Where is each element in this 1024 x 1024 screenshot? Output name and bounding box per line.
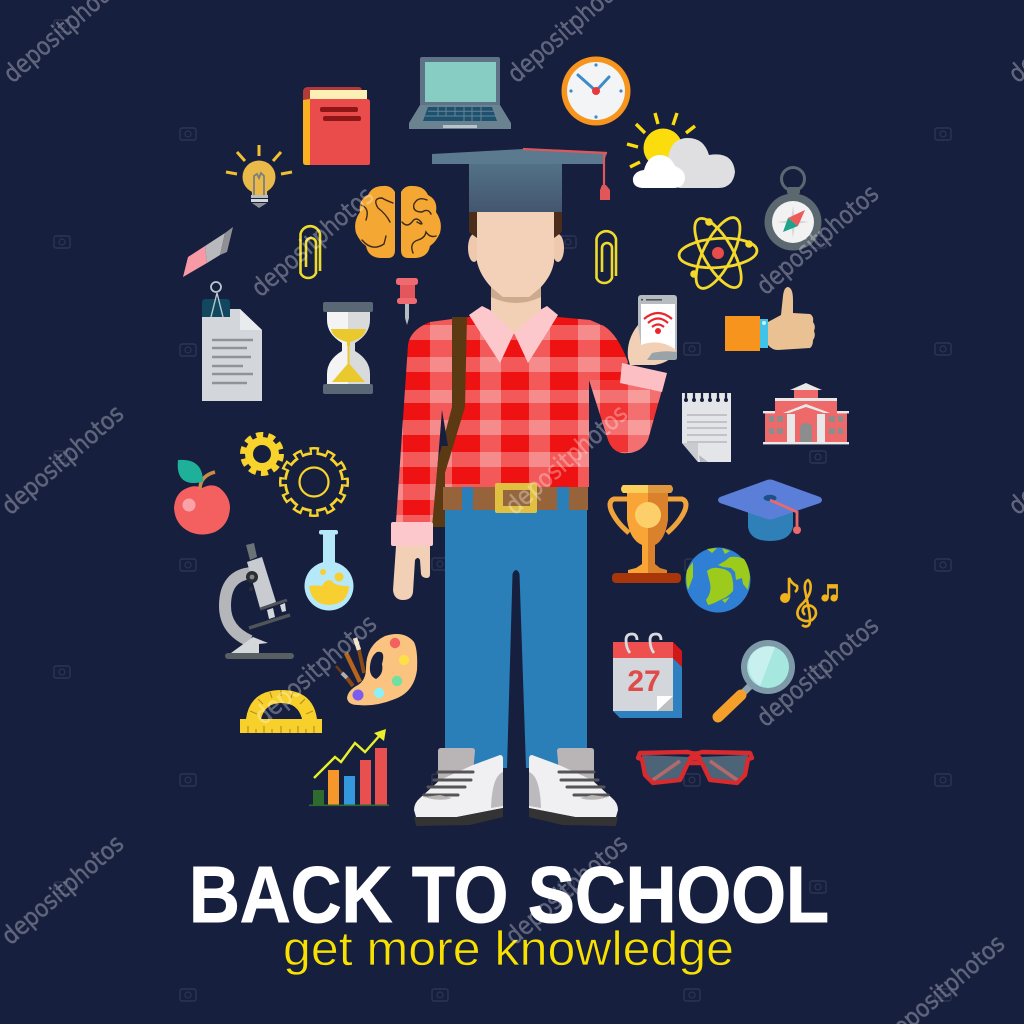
trousers — [445, 505, 587, 768]
icon: atom — [678, 212, 758, 294]
subtitle: get more knowledge — [283, 923, 734, 976]
icon: paper clip right — [596, 231, 616, 283]
icon: magnifying glass — [718, 640, 795, 717]
right cuff — [620, 363, 667, 392]
watermarks: depositphotos — [0, 829, 129, 950]
icon: music notes — [780, 578, 838, 626]
icon: earth globe — [686, 548, 750, 612]
icon: push pin — [396, 278, 418, 325]
icon: red glasses — [638, 752, 752, 783]
icon: hourglass — [323, 302, 373, 394]
left hand — [393, 546, 430, 600]
watermarks: depositphotos — [0, 399, 129, 520]
watermarks: depositphotos — [500, 399, 633, 520]
icon: school building — [763, 383, 849, 444]
icon: bar chart — [309, 729, 389, 806]
icon: apple — [174, 460, 230, 534]
icon: trophy — [610, 485, 686, 583]
icon: gears — [243, 435, 346, 514]
title: BACK TO SCHOOL — [189, 850, 829, 939]
shoulder bag strap — [432, 317, 467, 527]
sleeve gap — [440, 410, 448, 446]
icon: document with binder clip — [202, 282, 262, 401]
icon: compass — [764, 168, 822, 250]
left cuff — [391, 522, 433, 546]
icon: artist palette — [336, 634, 417, 705]
mortarboard hat — [432, 149, 610, 212]
left shoe — [414, 748, 503, 826]
treble clef — [797, 580, 816, 626]
icon: clock — [562, 56, 630, 126]
neck — [491, 285, 541, 335]
watermarks: depositphotos — [751, 611, 884, 732]
icon: paper clip left — [300, 226, 320, 278]
checked shirt — [396, 317, 662, 522]
face — [468, 212, 564, 303]
right shoe — [529, 748, 618, 826]
calendar date: 27 — [627, 665, 661, 698]
icon: brain — [355, 186, 441, 258]
watermarks: depositphotos — [249, 609, 382, 730]
belt — [443, 483, 588, 513]
collar — [469, 306, 558, 363]
large gear — [282, 450, 346, 514]
icon: light bulb — [226, 145, 292, 208]
watermarks: depositphotos — [500, 829, 633, 950]
icon: graduation cap small — [718, 480, 822, 541]
small gear — [243, 435, 281, 473]
icon: weather — [627, 113, 735, 188]
figure: student — [380, 149, 680, 826]
eighth note — [780, 578, 797, 603]
watermarks: depositphotos — [246, 181, 379, 302]
icon: calendar — [613, 634, 682, 718]
icon: flask — [304, 530, 354, 610]
icon: book — [303, 87, 370, 165]
watermarks: depositphotos — [751, 179, 884, 300]
icon: protractor — [240, 690, 322, 733]
icon: microscope — [225, 543, 294, 659]
icon: thumbs up — [725, 287, 815, 351]
icon: notepad — [682, 393, 731, 462]
icon: laptop — [409, 57, 511, 129]
phone in hand — [628, 295, 677, 365]
icon: eraser — [183, 227, 233, 277]
beamed notes — [821, 585, 838, 602]
